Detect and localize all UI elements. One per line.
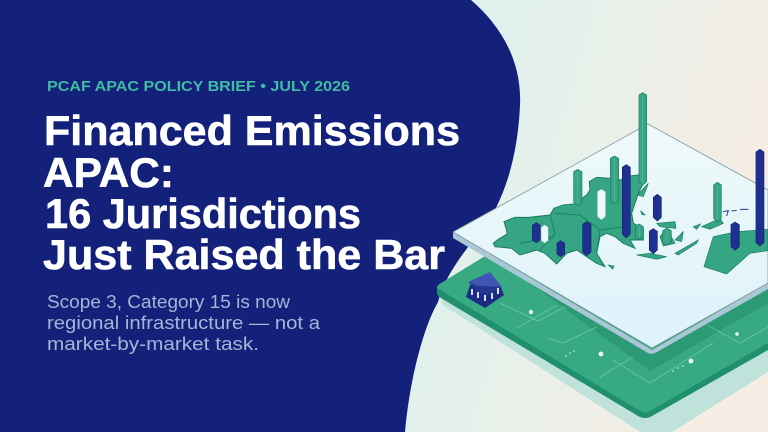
bars (532, 93, 764, 257)
subtitle: market-by-market task. (47, 334, 259, 354)
navy bars (532, 149, 764, 257)
isometric illustration (437, 93, 768, 432)
circuit lines (500, 303, 768, 383)
title (43, 107, 460, 278)
green bars (574, 93, 721, 245)
map of Asia-Pacific with bars (493, 93, 768, 274)
bar highlights (578, 95, 717, 243)
title: APAC: (43, 149, 174, 196)
subtitle: regional infrastructure — not a (47, 313, 321, 333)
title: Just Raised the Bar (43, 231, 445, 278)
landmass: Australia (704, 229, 768, 274)
title: Financed Emissions (44, 107, 460, 154)
darker inner shadow band (530, 283, 768, 371)
landmass: islands (608, 183, 768, 274)
landmass: mainland Asia (493, 175, 643, 267)
subtitle (47, 292, 321, 354)
green circuit platform (437, 250, 768, 418)
platform shadow (440, 297, 768, 432)
circuit nodes (529, 310, 739, 372)
border lines (520, 213, 623, 253)
bank icon (466, 272, 504, 308)
title: 16 Jurisdictions (45, 190, 361, 237)
subtitle: Scope 3, Category 15 is now (47, 292, 291, 312)
Pacific island dashes (723, 209, 748, 216)
white bars (541, 189, 606, 243)
text block: headline area (43, 79, 460, 354)
light background blob (405, 0, 768, 432)
eyebrow label: PCAF APAC POLICY BRIEF • JULY 2026 (47, 79, 350, 95)
map board (453, 93, 768, 354)
